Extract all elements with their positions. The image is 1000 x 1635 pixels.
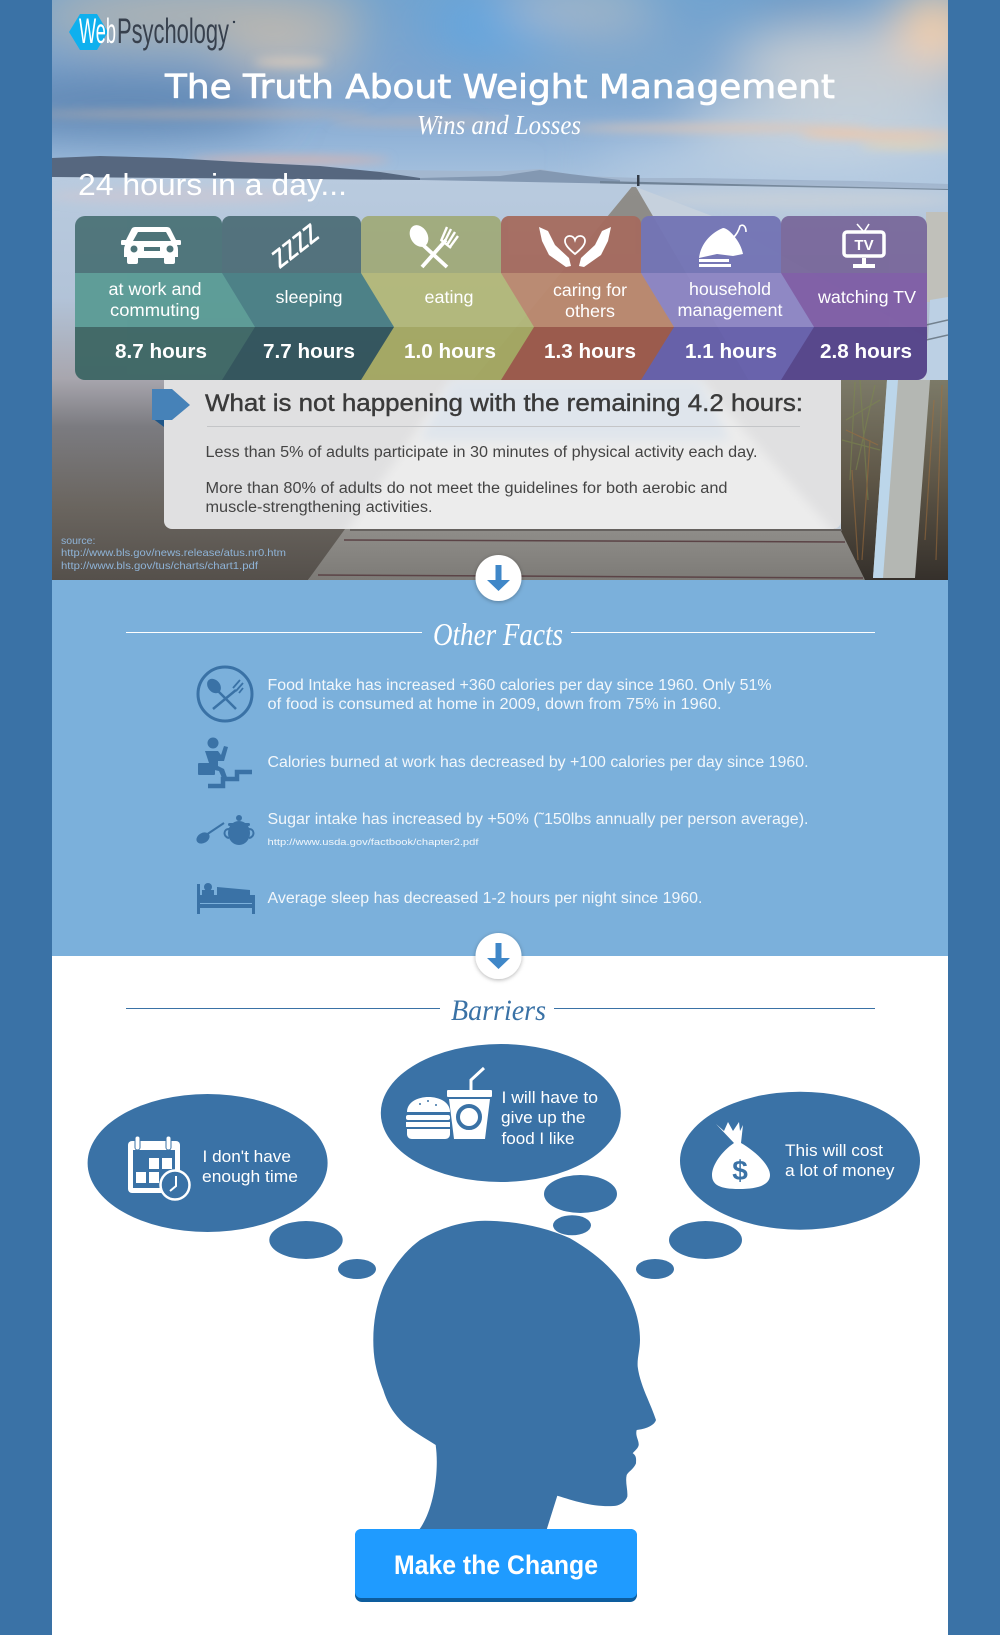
fact text: calories burned: Calories burned at work has decreased by +100 calories per day since 1960. bbox=[268, 754, 808, 771]
icon: sleeping zzzz: zzzz bbox=[261, 213, 326, 275]
callout text: Less than 5% of adults participate in 30 minutes of physical activity each day. bbox=[206, 444, 758, 461]
icon: calendar and clock bbox=[128, 1136, 190, 1200]
icon: food circle bbox=[198, 667, 252, 721]
bubble text: I will have to bbox=[502, 1088, 598, 1107]
heading: other facts: Other Facts bbox=[433, 616, 563, 652]
fact text: food intake bbox=[268, 677, 772, 713]
fact text: sugar intake bbox=[268, 811, 808, 848]
concrete post bbox=[873, 380, 930, 578]
column labels: sleeping bbox=[276, 287, 342, 307]
hero photo of a jetty on a lake bbox=[52, 0, 948, 580]
section heading: 24 hours: 24 hours in a day... bbox=[78, 167, 347, 202]
icon: bed bbox=[197, 883, 255, 914]
planks bbox=[308, 529, 865, 580]
bubble text bbox=[785, 1141, 895, 1180]
icon: person climbing stairs bbox=[198, 738, 252, 786]
hours values: 1.0 hours bbox=[404, 340, 496, 363]
icon: car bbox=[121, 227, 181, 264]
icon: spoon and sugar pot bbox=[194, 815, 254, 846]
callout text: muscle-strengthening activities. bbox=[206, 499, 432, 516]
column labels bbox=[108, 279, 916, 321]
panel: barriers bbox=[52, 956, 948, 1635]
right rail and reeds bbox=[926, 212, 948, 302]
icon: caring hands with heart bbox=[539, 227, 611, 267]
column labels: management bbox=[678, 300, 783, 320]
bubble text: I don't have bbox=[202, 1147, 291, 1166]
panel: other facts bbox=[52, 580, 948, 956]
source links: http://www.bls.gov/tus/charts/chart1.pdf bbox=[61, 560, 258, 572]
logo: Psychology bbox=[117, 12, 229, 51]
thought bubble: money bbox=[636, 1092, 920, 1279]
title: The Truth About Weight Management bbox=[164, 67, 835, 106]
column labels: at work and bbox=[108, 279, 202, 299]
icon: spoon and fork bbox=[406, 222, 458, 267]
icon: down arrow badge 1 bbox=[476, 555, 522, 601]
icon: television: TV bbox=[854, 237, 874, 254]
button: make the change: Make the Change bbox=[394, 1550, 598, 1580]
hours values: 1.3 hours bbox=[544, 340, 636, 363]
bubble text bbox=[501, 1088, 598, 1148]
fact text: food intake: of food is consumed at home in 2009, down from 75% in 1960. bbox=[268, 696, 722, 713]
icon: television bbox=[844, 224, 884, 268]
source links bbox=[61, 535, 286, 572]
thought bubble: food bbox=[381, 1044, 621, 1235]
hours values: 8.7 hours bbox=[115, 340, 207, 363]
fact text: sugar intake: Sugar intake has increased by +50% (˜150lbs annually per person average). bbox=[268, 811, 808, 828]
source links: source: bbox=[61, 535, 95, 547]
bubble text: This will cost bbox=[785, 1141, 883, 1160]
thought bubble: time bbox=[88, 1094, 376, 1279]
bubble text: food I like bbox=[502, 1129, 574, 1148]
distant hills bbox=[374, 169, 948, 189]
column labels: commuting bbox=[110, 300, 200, 320]
column labels: eating bbox=[424, 287, 474, 307]
icon: iron bbox=[699, 225, 746, 267]
panel: remaining hours callout bbox=[152, 380, 841, 540]
fact text: food intake: Food Intake has increased +360 calories per day since 1960. Only 51% bbox=[268, 677, 772, 694]
fact text: sleep: Average sleep has decreased 1-2 hours per night since 1960. bbox=[268, 890, 702, 907]
head silhouette bbox=[373, 1221, 656, 1530]
source links: http://www.bls.gov/news.release/atus.nr0.htm bbox=[61, 547, 286, 559]
column labels: watching TV bbox=[817, 287, 916, 307]
heading: barriers: Barriers bbox=[451, 994, 546, 1027]
icon: money bag bbox=[712, 1122, 770, 1189]
hours values: 2.8 hours bbox=[820, 340, 912, 363]
icon: flag arrow bbox=[152, 389, 190, 427]
column labels: household bbox=[689, 279, 771, 299]
jetty bbox=[637, 175, 640, 186]
icon: money bag: $ bbox=[732, 1155, 748, 1186]
panel: 24 hour breakdown table bbox=[75, 213, 927, 380]
column labels: others bbox=[565, 301, 615, 321]
button: make the change bbox=[355, 1529, 637, 1602]
hours values: 7.7 hours bbox=[263, 340, 355, 363]
bubble text bbox=[202, 1147, 298, 1186]
column labels: caring for bbox=[553, 280, 627, 300]
logo: Web bbox=[79, 12, 116, 51]
callout text bbox=[206, 444, 758, 516]
callout text: More than 80% of adults do not meet the guidelines for both aerobic and bbox=[206, 480, 728, 497]
callout heading: What is not happening with the remaining 4.2 hours: bbox=[205, 390, 803, 417]
bubble text: give up the bbox=[501, 1108, 586, 1127]
hours values: 1.1 hours bbox=[685, 340, 777, 363]
icon: down arrow badge 2 bbox=[476, 933, 522, 979]
logo bbox=[69, 12, 235, 51]
subtitle: Wins and Losses bbox=[417, 110, 581, 140]
bubble text: enough time bbox=[202, 1167, 298, 1186]
hours values bbox=[115, 340, 912, 363]
bubble text: a lot of money bbox=[785, 1161, 895, 1180]
icon: burger and drink bbox=[406, 1068, 492, 1139]
fact text: sugar intake: http://www.usda.gov/factbook/chapter2.pdf bbox=[268, 837, 479, 848]
